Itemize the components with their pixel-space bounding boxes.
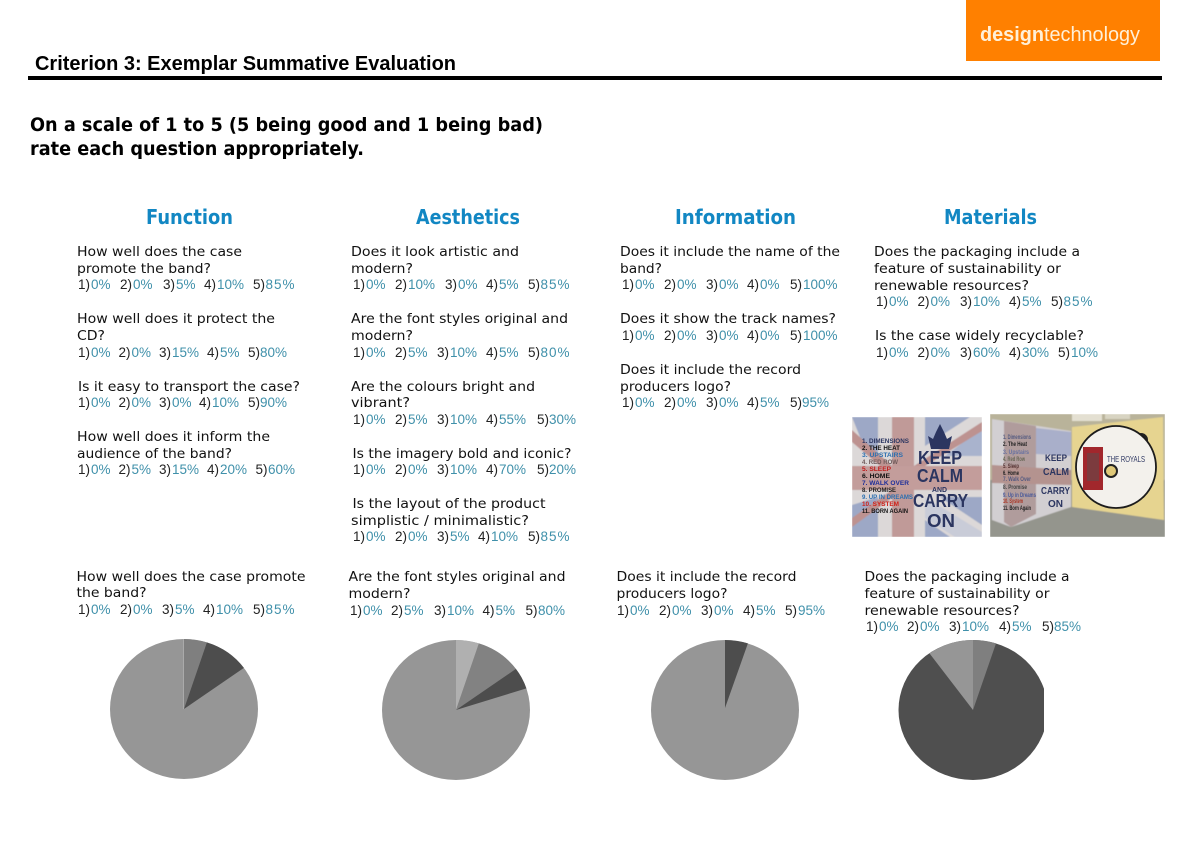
question: colours: 1) xyxy=(353,412,365,427)
question: protect the CD: How well does it protect the xyxy=(77,311,275,327)
artwork track list: 1. DIMENSIONS xyxy=(862,439,909,445)
example question: font styles: 3) xyxy=(434,603,446,618)
panel: function xyxy=(77,205,300,477)
question: name of the band: 3) xyxy=(706,277,718,292)
question: name of the band: 5) xyxy=(790,277,802,292)
CD disc: THE ROYALS xyxy=(1107,454,1145,464)
question: producers logo: Does it include the record xyxy=(620,362,801,378)
question: font styles: Are the font styles original and xyxy=(351,311,568,327)
question: layout: 4) xyxy=(478,529,490,544)
question: imagery: 10% xyxy=(450,462,477,477)
instruction text: rate each question appropriately. xyxy=(30,138,364,160)
example question: producers logo: 5% xyxy=(756,603,776,618)
question: imagery: 2) xyxy=(395,462,407,477)
question: artistic and modern: 1) xyxy=(353,277,365,292)
example question: font styles: 5% xyxy=(404,603,424,618)
example question: producers logo: 1) xyxy=(617,603,629,618)
question: artistic and modern: modern? xyxy=(351,261,413,277)
example question: sustainability: 4) xyxy=(999,619,1011,634)
question: producers logo: 0% xyxy=(719,395,739,410)
question: easy to transport: 0% xyxy=(132,395,151,410)
example question: font styles: 1) xyxy=(350,603,362,618)
question: font styles: 80% xyxy=(540,345,571,360)
question: protect the CD: 15% xyxy=(172,345,199,360)
question: name of the band: band? xyxy=(620,261,662,277)
question: imagery xyxy=(352,446,576,477)
example question: producers logo xyxy=(616,569,825,618)
question: name of the band: 0% xyxy=(677,277,697,292)
artwork slogan xyxy=(913,448,968,531)
example question: promote the band: 4) xyxy=(203,602,215,617)
question: inform the audience: 2) xyxy=(118,462,131,477)
question: protect the CD: 80% xyxy=(260,345,287,360)
panel: aesthetics xyxy=(351,205,576,544)
packaging left panel text: 7. Walk Over xyxy=(1003,477,1032,483)
question: sustainability: 1) xyxy=(876,294,888,309)
packaging left panel text: 8. Promise xyxy=(1003,485,1028,491)
packaging left panel text: 1. Dimensions xyxy=(1003,435,1031,441)
heading: materials: Materials xyxy=(944,205,1037,229)
question: font styles: 0% xyxy=(366,345,386,360)
question: easy to transport: 90% xyxy=(260,395,287,410)
question: protect the CD: 5) xyxy=(248,345,260,360)
example question: sustainability: feature of sustainability or xyxy=(864,586,1050,602)
question: artistic and modern: 0% xyxy=(458,277,478,292)
question: promote the band: 4) xyxy=(204,277,216,292)
question: track names: 100% xyxy=(803,328,838,343)
question: imagery: 20% xyxy=(549,462,576,477)
question: colours: 5) xyxy=(537,412,549,427)
packaging left panel text: 3. Upstairs xyxy=(1003,450,1030,456)
question: imagery: 0% xyxy=(366,462,386,477)
question: sustainability: feature of sustainability or xyxy=(874,261,1061,277)
question: colours: 55% xyxy=(499,412,526,427)
question: producers logo: 5% xyxy=(760,395,780,410)
packaging left panel text: CARRY xyxy=(1041,486,1070,497)
question: colours: 3) xyxy=(437,412,449,427)
packaging left panel text: 2. The Heat xyxy=(1003,442,1027,448)
instruction text: On a scale of 1 to 5 (5 being good and 1 being bad) xyxy=(30,114,543,136)
question: inform the audience: 1) xyxy=(78,462,90,477)
question: producers logo: 4) xyxy=(747,395,759,410)
example question: promote the band: 2) xyxy=(120,602,132,617)
question: font styles: 5% xyxy=(408,345,428,360)
question: protect the CD: 0% xyxy=(91,345,111,360)
question: recyclable: 1) xyxy=(876,345,888,360)
question: layout: 10% xyxy=(491,529,518,544)
question: layout: 85% xyxy=(540,529,571,544)
pie chart: producers logo xyxy=(651,640,799,780)
example question: producers logo: 4) xyxy=(743,603,755,618)
example question: font styles xyxy=(348,569,566,618)
example question: promote the band: 10% xyxy=(216,602,243,617)
logo: designtechnology: designtechnology xyxy=(980,24,1140,46)
question: protect the CD: 3) xyxy=(159,345,171,360)
example question: producers logo: 5) xyxy=(785,603,797,618)
question: protect the CD: 5% xyxy=(220,345,240,360)
example question: producers logo: Does it include the record xyxy=(616,569,796,585)
question: imagery: 1) xyxy=(353,462,365,477)
example question: font styles: 5) xyxy=(526,603,538,618)
question: producers logo: 0% xyxy=(635,395,655,410)
question: sustainability: renewable resources? xyxy=(874,278,1029,294)
example question: promote the band: 85% xyxy=(266,602,296,617)
packaging left panel text xyxy=(1003,435,1070,512)
question: producers logo: 3) xyxy=(706,395,718,410)
question: promote the band: 5) xyxy=(253,277,265,292)
CD disc xyxy=(1076,426,1156,508)
question: easy to transport: 3) xyxy=(159,395,171,410)
question: layout: 3) xyxy=(437,529,449,544)
question: name of the band: 1) xyxy=(622,277,634,292)
example question: font styles: Are the font styles original and xyxy=(348,569,566,585)
example question: sustainability: 0% xyxy=(879,619,899,634)
example question: sustainability: 3) xyxy=(949,619,961,634)
question: name of the band: 0% xyxy=(719,277,739,292)
question: easy to transport: 0% xyxy=(172,395,192,410)
question: colours: vibrant? xyxy=(351,395,410,411)
example question: promote the band: 5) xyxy=(253,602,265,617)
question: track names: 4) xyxy=(747,328,759,343)
question: promote the band: 2) xyxy=(120,277,132,292)
question: promote the band: 85% xyxy=(266,277,296,292)
question: artistic and modern: 10% xyxy=(408,277,435,292)
packaging left panel text: ON xyxy=(1048,499,1063,510)
question: font styles: modern? xyxy=(351,328,413,344)
artwork track list xyxy=(862,439,913,515)
artwork track list: 2. THE HEAT xyxy=(862,446,900,452)
question: inform the audience: 5% xyxy=(132,462,151,477)
question: sustainability: 0% xyxy=(889,294,909,309)
question: name of the band: 100% xyxy=(803,277,838,292)
question: inform the audience: 0% xyxy=(91,462,111,477)
instruction text xyxy=(30,114,543,160)
question: imagery: Is the imagery bold and iconic? xyxy=(352,446,572,462)
question: sustainability: Does the packaging include a xyxy=(874,244,1080,260)
example question: promote the band: How well does the case promote xyxy=(76,569,306,585)
question: font styles: 2) xyxy=(395,345,407,360)
question: sustainability: 10% xyxy=(973,294,1000,309)
question: colours: 0% xyxy=(366,412,386,427)
question: recyclable: 60% xyxy=(973,345,1000,360)
heading: aesthetics: Aesthetics xyxy=(416,205,520,229)
artwork slogan: CARRY xyxy=(913,491,968,511)
question: recyclable: 10% xyxy=(1071,345,1098,360)
question: protect the CD: 2) xyxy=(118,345,131,360)
panel: materials xyxy=(874,205,1098,360)
question: protect the CD: 4) xyxy=(207,345,219,360)
question: colours: 30% xyxy=(549,412,576,427)
example question: sustainability: 2) xyxy=(907,619,919,634)
question: inform the audience: 3) xyxy=(159,462,171,477)
question: font styles xyxy=(351,311,571,360)
question: promote the band: 1) xyxy=(78,277,90,292)
example question: producers logo: producers logo? xyxy=(616,586,728,602)
question: promote the band xyxy=(77,244,296,292)
question: artistic and modern: 4) xyxy=(486,277,498,292)
artwork track list: 4. RED ROW xyxy=(862,460,898,466)
artwork track list: 5. SLEEP xyxy=(862,467,891,473)
question: easy to transport: 10% xyxy=(212,395,239,410)
example question: font styles: 2) xyxy=(391,603,403,618)
example question: producers logo: 95% xyxy=(798,603,825,618)
question: imagery: 0% xyxy=(408,462,428,477)
question: inform the audience: How well does it inform the xyxy=(77,429,270,445)
example question: producers logo: 0% xyxy=(630,603,650,618)
example question: font styles: 10% xyxy=(447,603,474,618)
image: photo of CD packaging xyxy=(990,414,1165,537)
question: track names: 3) xyxy=(706,328,718,343)
panel: information xyxy=(620,205,840,410)
example question: promote the band: the band? xyxy=(76,585,146,601)
question: recyclable: 0% xyxy=(889,345,909,360)
pie chart: sustainability xyxy=(898,640,1048,780)
question: inform the audience: 15% xyxy=(172,462,199,477)
example question: producers logo: 0% xyxy=(672,603,692,618)
question: promote the band: 3) xyxy=(163,277,175,292)
question: recyclable: 0% xyxy=(930,345,950,360)
question: track names: 1) xyxy=(622,328,634,343)
artwork slogan: KEEP xyxy=(918,448,962,468)
question: track names: 2) xyxy=(664,328,676,343)
question: producers logo: 95% xyxy=(802,395,829,410)
example question: promote the band: 1) xyxy=(78,602,90,617)
question: artistic and modern: Does it look artistic and xyxy=(351,244,519,260)
example question: sustainability: 5% xyxy=(1012,619,1032,634)
question: recyclable: 5) xyxy=(1058,345,1070,360)
example question: promote the band: 0% xyxy=(133,602,153,617)
question: recyclable: 30% xyxy=(1022,345,1049,360)
example question: sustainability: 85% xyxy=(1054,619,1081,634)
example question: sustainability: 10% xyxy=(962,619,989,634)
question: layout: 5% xyxy=(450,529,470,544)
question: imagery: 70% xyxy=(499,462,526,477)
question: layout xyxy=(351,496,571,544)
question: name of the band: 0% xyxy=(760,277,780,292)
question: recyclable xyxy=(875,328,1098,360)
example question: promote the band: 0% xyxy=(91,602,111,617)
question: promote the band: How well does the case xyxy=(77,244,242,260)
question: sustainability: 5% xyxy=(1022,294,1042,309)
artwork slogan: CALM xyxy=(917,466,963,486)
question: inform the audience: 20% xyxy=(220,462,247,477)
question: track names: 0% xyxy=(719,328,739,343)
packaging left panel text: 5. Sleep xyxy=(1003,464,1019,470)
question: promote the band: 5% xyxy=(176,277,196,292)
title: Criterion 3: Exemplar Summative Evaluation xyxy=(35,53,456,75)
packaging left panel text: 9. Up in Dreams xyxy=(1003,493,1036,499)
question: track names: 0% xyxy=(635,328,655,343)
example question: promote the band: 5% xyxy=(175,602,195,617)
question: recyclable: 3) xyxy=(960,345,972,360)
pie chart: promote the band xyxy=(110,639,258,779)
packaging left panel text: KEEP xyxy=(1045,453,1068,464)
question: easy to transport: 0% xyxy=(91,395,111,410)
question: font styles: 1) xyxy=(353,345,365,360)
example question: producers logo: 0% xyxy=(714,603,734,618)
question: easy to transport: 4) xyxy=(199,395,211,410)
question: artistic and modern: 3) xyxy=(445,277,457,292)
packaging: yellow CD board xyxy=(1072,417,1164,520)
question: font styles: 4) xyxy=(486,345,498,360)
artwork track list: 11. BORN AGAIN xyxy=(862,509,908,515)
question: colours: 5% xyxy=(408,412,428,427)
question: colours: 2) xyxy=(395,412,407,427)
question: sustainability: 5) xyxy=(1051,294,1063,309)
example question: font styles: modern? xyxy=(348,586,410,602)
example question: font styles: 5% xyxy=(496,603,515,618)
example question: font styles: 4) xyxy=(482,603,495,618)
packaging left panel text: 11. Born Again xyxy=(1003,506,1031,512)
example question: sustainability: 1) xyxy=(866,619,878,634)
question: producers logo: 5) xyxy=(790,395,802,410)
question: imagery: 4) xyxy=(486,462,498,477)
question: inform the audience: 4) xyxy=(207,462,219,477)
question: layout: 2) xyxy=(395,529,407,544)
question: colours xyxy=(351,379,576,427)
image: album cover artwork xyxy=(852,417,982,537)
question: name of the band xyxy=(620,244,840,292)
example question: promote the band: 3) xyxy=(162,602,174,617)
question: layout: simplistic / minimalistic? xyxy=(351,513,529,529)
example question: sustainability: Does the packaging include a xyxy=(864,569,1070,585)
question: inform the audience: 5) xyxy=(256,462,268,477)
question: font styles: 10% xyxy=(450,345,477,360)
question: sustainability xyxy=(874,244,1094,309)
heading: information: Information xyxy=(675,205,796,229)
question: artistic and modern xyxy=(351,244,571,292)
question: promote the band: 0% xyxy=(133,277,153,292)
example question: producers logo: 3) xyxy=(701,603,713,618)
question: track names: 5) xyxy=(790,328,802,343)
question: sustainability: 85% xyxy=(1064,294,1094,309)
example question: font styles: 0% xyxy=(363,603,383,618)
question: name of the band: 2) xyxy=(664,277,676,292)
question: producers logo: 1) xyxy=(622,395,634,410)
example question: sustainability: 0% xyxy=(920,619,940,634)
question: name of the band: 4) xyxy=(747,277,759,292)
question: producers logo: 2) xyxy=(664,395,676,410)
question: sustainability: 0% xyxy=(930,294,950,309)
question: font styles: 3) xyxy=(437,345,449,360)
question: protect the CD: CD? xyxy=(77,328,105,344)
question: promote the band: 0% xyxy=(91,277,111,292)
example question: producers logo: 2) xyxy=(659,603,671,618)
question: artistic and modern: 2) xyxy=(395,277,407,292)
question: track names: Does it show the track names? xyxy=(620,311,836,327)
question: inform the audience: audience of the band? xyxy=(77,446,232,462)
question: promote the band: 10% xyxy=(217,277,244,292)
question: easy to transport xyxy=(78,379,300,410)
question: track names xyxy=(620,311,838,343)
question: track names: 0% xyxy=(677,328,697,343)
question: easy to transport: 1) xyxy=(78,395,90,410)
question: name of the band: Does it include the name of the xyxy=(620,244,840,260)
question: name of the band: 0% xyxy=(635,277,655,292)
question: artistic and modern: 5% xyxy=(499,277,519,292)
question: layout: 1) xyxy=(353,529,365,544)
question: inform the audience: 60% xyxy=(268,462,295,477)
question: colours: 10% xyxy=(450,412,477,427)
question: font styles: 5) xyxy=(528,345,540,360)
example question: sustainability: 5) xyxy=(1042,619,1054,634)
question: sustainability: 2) xyxy=(918,294,930,309)
question: easy to transport: 2) xyxy=(118,395,131,410)
example question: promote the band xyxy=(76,569,306,617)
icon: crown xyxy=(928,424,952,449)
question: promote the band: promote the band? xyxy=(77,261,211,277)
question: track names: 0% xyxy=(760,328,780,343)
question: sustainability: 3) xyxy=(960,294,972,309)
artwork slogan: ON xyxy=(927,511,955,531)
artwork slogan: AND xyxy=(932,487,947,494)
question: imagery: 3) xyxy=(437,462,449,477)
logo: designtechnology xyxy=(966,0,1160,61)
artwork track list: 6. HOME xyxy=(862,474,890,480)
packaging left panel text: 6. Home xyxy=(1003,471,1019,477)
question: protect the CD xyxy=(77,311,287,360)
artwork track list: 9. UP IN DREAMS xyxy=(862,495,913,501)
question: layout: 5) xyxy=(528,529,540,544)
packaging left panel text: CALM xyxy=(1043,467,1069,478)
question: layout: 0% xyxy=(408,529,428,544)
packaging left panel text: 10. System xyxy=(1003,499,1023,505)
question: imagery: 5) xyxy=(537,462,549,477)
question: inform the audience xyxy=(77,429,295,477)
question: easy to transport: Is it easy to transport the case? xyxy=(78,379,300,395)
question: layout: 0% xyxy=(366,529,386,544)
panel: example results xyxy=(76,569,1081,780)
question: colours: 4) xyxy=(486,412,498,427)
example question: sustainability xyxy=(864,569,1081,634)
question: easy to transport: 5) xyxy=(248,395,260,410)
question: producers logo: 0% xyxy=(677,395,697,410)
heading: function: Function xyxy=(146,205,233,229)
question: artistic and modern: 85% xyxy=(540,277,571,292)
question: producers logo: producers logo? xyxy=(620,379,731,395)
question: recyclable: Is the case widely recyclable? xyxy=(875,328,1084,344)
example question: sustainability: renewable resources? xyxy=(864,603,1020,619)
packaging left panel text: 4. Red Row xyxy=(1003,457,1025,463)
question: recyclable: 4) xyxy=(1009,345,1021,360)
question: layout: Is the layout of the product xyxy=(352,496,546,512)
question: font styles: 5% xyxy=(499,345,519,360)
artwork track list: 7. WALK OVER xyxy=(862,481,910,487)
example question: font styles: 80% xyxy=(538,603,565,618)
question: protect the CD: 0% xyxy=(132,345,151,360)
artwork track list: 3. UPSTAIRS xyxy=(862,453,903,459)
question: recyclable: 2) xyxy=(918,345,930,360)
artwork track list: 8. PROMISE xyxy=(862,488,896,494)
question: sustainability: 4) xyxy=(1009,294,1021,309)
question: colours: Are the colours bright and xyxy=(351,379,535,395)
artwork track list: 10. SYSTEM xyxy=(862,502,899,508)
question: artistic and modern: 5) xyxy=(528,277,540,292)
question: producers logo xyxy=(620,362,829,410)
question: artistic and modern: 0% xyxy=(366,277,386,292)
pie chart: font styles xyxy=(382,640,530,780)
question: protect the CD: 1) xyxy=(78,345,90,360)
